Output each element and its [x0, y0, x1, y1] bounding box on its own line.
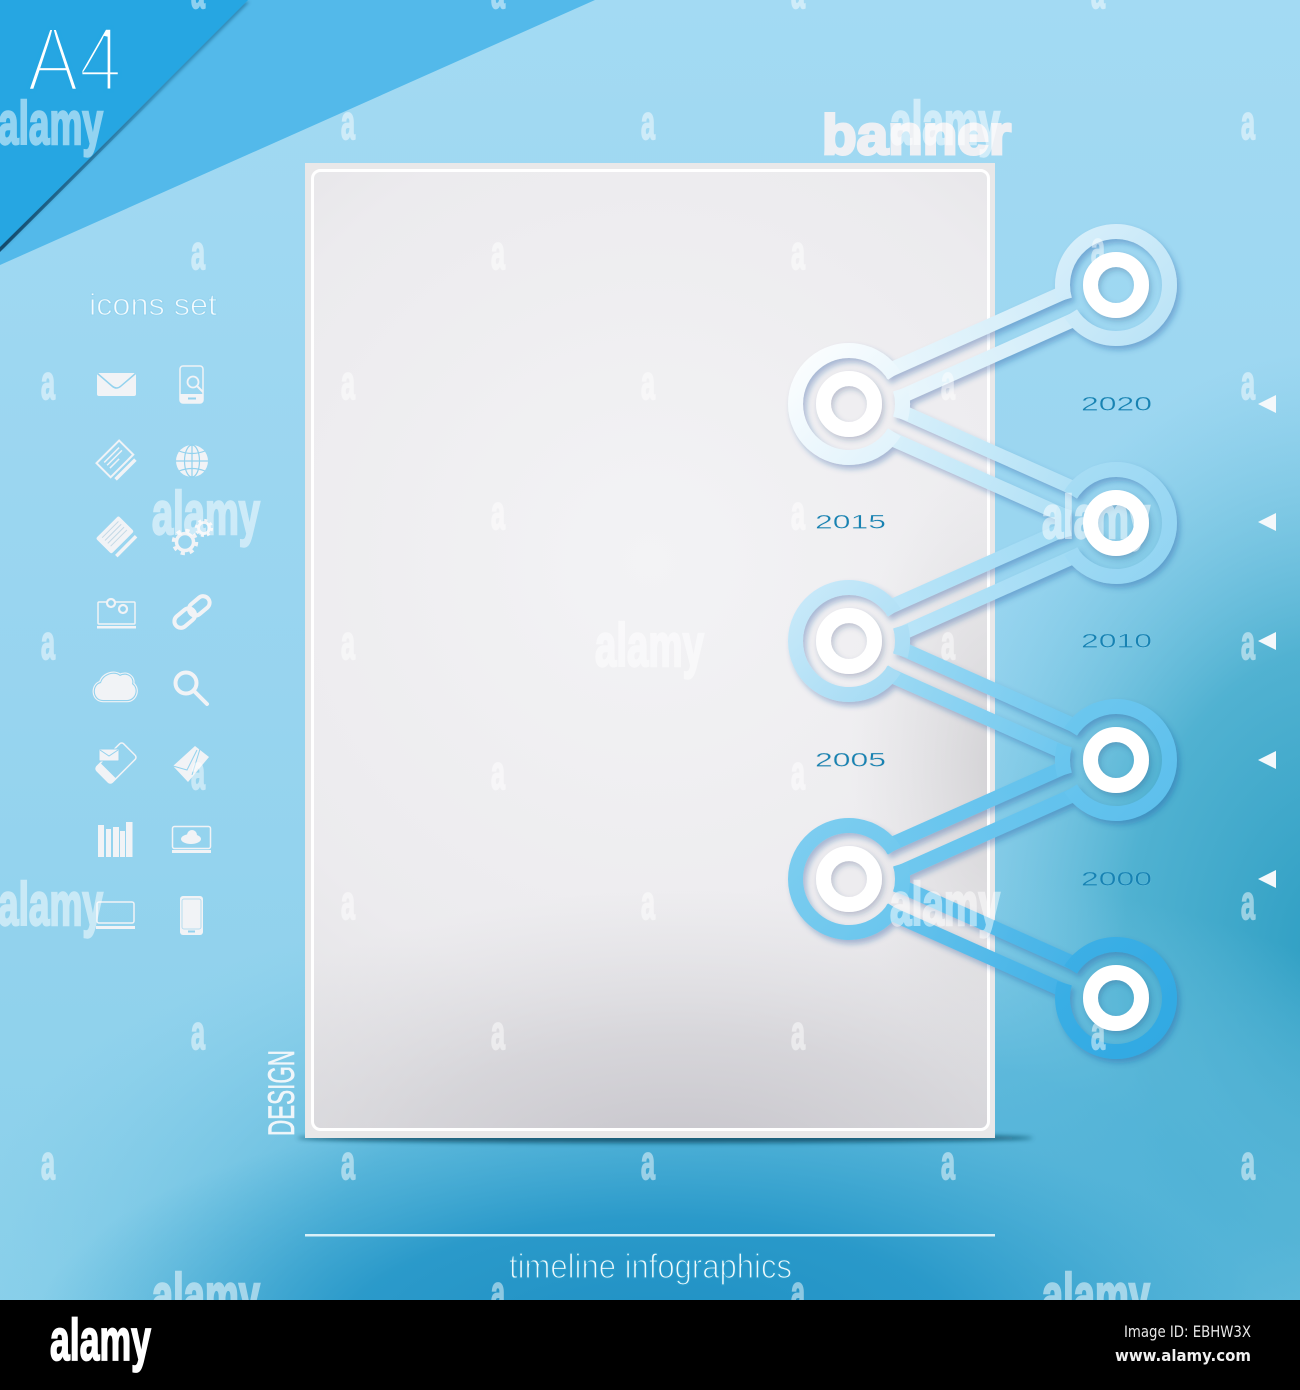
icon: chain link — [172, 594, 212, 630]
caption: timeline infographics: timeline infographics — [509, 1248, 792, 1286]
label: DESIGN: DESIGN — [261, 1050, 302, 1136]
connector: 2015 to 2010 — [881, 403, 1083, 524]
watermark: small letters: a — [491, 1007, 505, 1060]
ring: middle left — [795, 588, 903, 694]
watermark: small letters: a — [1091, 223, 1105, 276]
icon: phone with envelope — [95, 742, 137, 784]
icon: envelope — [97, 373, 136, 396]
watermark: alamy words: alamy — [152, 1262, 260, 1329]
year: 2010: 2010 — [1081, 632, 1152, 652]
watermark: small letters: a — [491, 227, 505, 280]
ring: lower left — [795, 826, 903, 932]
ring: bottom right — [1062, 945, 1169, 1052]
panel: paper shadow — [297, 1133, 1033, 1143]
watermark: alamy words — [0, 90, 1150, 1329]
connector: 2005 to 2000 — [881, 640, 1083, 761]
watermark: alamy words: alamy — [152, 480, 260, 547]
ring: upper left — [795, 350, 903, 458]
icon: magnifier — [176, 672, 207, 704]
watermark: small letters: a — [1241, 1137, 1255, 1190]
corner banner: folded triangles — [0, 0, 595, 265]
watermark: small letters: a — [791, 487, 805, 540]
icon: bar chart — [98, 822, 132, 857]
icon: notebook outline — [96, 440, 137, 481]
timeline chain — [795, 231, 1170, 1052]
connector: 2005 to 2010 — [881, 521, 1083, 642]
watermark: alamy words: alamy — [1042, 484, 1150, 551]
watermark: small letters: a — [1241, 97, 1255, 150]
footer bar — [0, 1300, 1300, 1390]
watermark: alamy words: alamy — [890, 90, 1000, 157]
connector: lower left to 2000 — [881, 759, 1083, 880]
watermark: small letters: a — [341, 877, 355, 930]
icon: smartphone — [180, 896, 203, 935]
watermark: small letters: a — [941, 617, 955, 670]
connector: 2015 to 2020 — [881, 284, 1083, 405]
connector: lower left to bottom right — [881, 878, 1083, 999]
icon: cloud — [95, 674, 136, 700]
ring: top right — [1062, 231, 1169, 338]
watermark: small letters: a — [941, 357, 955, 410]
divider line — [305, 1234, 995, 1236]
watermark: alamy words: alamy — [0, 90, 103, 157]
watermark: small letters: a — [791, 227, 805, 280]
footer text: website: www.alamy.com — [1115, 1346, 1251, 1365]
watermark: small letters: a — [41, 617, 55, 670]
icon: laptop — [96, 902, 135, 929]
arrow markers — [1258, 395, 1276, 888]
heading: icons set: icons set — [89, 287, 217, 322]
panel: A4 paper sheet — [305, 163, 995, 1138]
ring: second right — [1062, 470, 1170, 576]
heading: A4: A4 — [27, 9, 122, 111]
watermark: small letters: a — [641, 97, 655, 150]
watermark: small letters: a — [941, 1137, 955, 1190]
icon: laptop with gears — [97, 599, 136, 628]
watermark: small letters: a — [341, 357, 355, 410]
watermark: small letters: a — [1091, 1007, 1105, 1060]
watermark: small letters: a — [641, 1137, 655, 1190]
watermark: alamy words: alamy — [0, 871, 103, 938]
watermark: small letters: a — [191, 747, 205, 800]
icon: globe — [176, 445, 208, 477]
watermark: small letters: a — [791, 1267, 805, 1320]
watermark: small letters: a — [341, 97, 355, 150]
year: 2020: 2020 — [1081, 394, 1152, 416]
year: 2000: 2000 — [1081, 870, 1152, 890]
watermark: alamy words: alamy — [890, 871, 1000, 938]
icon: gears — [174, 520, 212, 554]
label: banner: banner — [822, 103, 1011, 166]
footer text: image id: Image ID: EBHW3X — [1124, 1322, 1251, 1341]
white node discs — [824, 260, 1142, 1024]
watermark: small letters: a — [41, 1137, 55, 1190]
watermark: small letters: a — [641, 877, 655, 930]
watermark: small letters: a — [341, 1137, 355, 1190]
watermark: small letters: a — [491, 747, 505, 800]
watermark: alamy words: alamy — [595, 612, 704, 679]
icons grid — [95, 366, 212, 935]
watermark: small letters: a — [791, 747, 805, 800]
footer logo: alamy: alamy — [50, 1308, 151, 1373]
icon: notebook filled — [96, 516, 138, 558]
watermark: small letters: a — [1241, 617, 1255, 670]
ring: third right — [1062, 706, 1170, 814]
watermark: small letters: a — [1241, 357, 1255, 410]
watermark: small letters: a — [491, 487, 505, 540]
watermark: small letters: a — [191, 1007, 205, 1060]
watermark: small letters: a — [641, 357, 655, 410]
watermark: small letters: a — [791, 1007, 805, 1060]
watermark: small letters: a — [41, 357, 55, 410]
watermark: alamy words: alamy — [1042, 1262, 1150, 1329]
watermark: small letters: a — [341, 617, 355, 670]
watermark: small letters: a — [1241, 877, 1255, 930]
icon: laptop with cloud — [172, 826, 211, 853]
year: 2005: 2005 — [815, 750, 886, 772]
year labels — [815, 394, 1152, 890]
year: 2015: 2015 — [815, 512, 886, 534]
watermark: small letters: a — [191, 227, 205, 280]
icon: envelope stack — [173, 746, 209, 782]
watermark: small letters: a — [491, 1267, 505, 1320]
icon: phone search — [180, 366, 204, 403]
